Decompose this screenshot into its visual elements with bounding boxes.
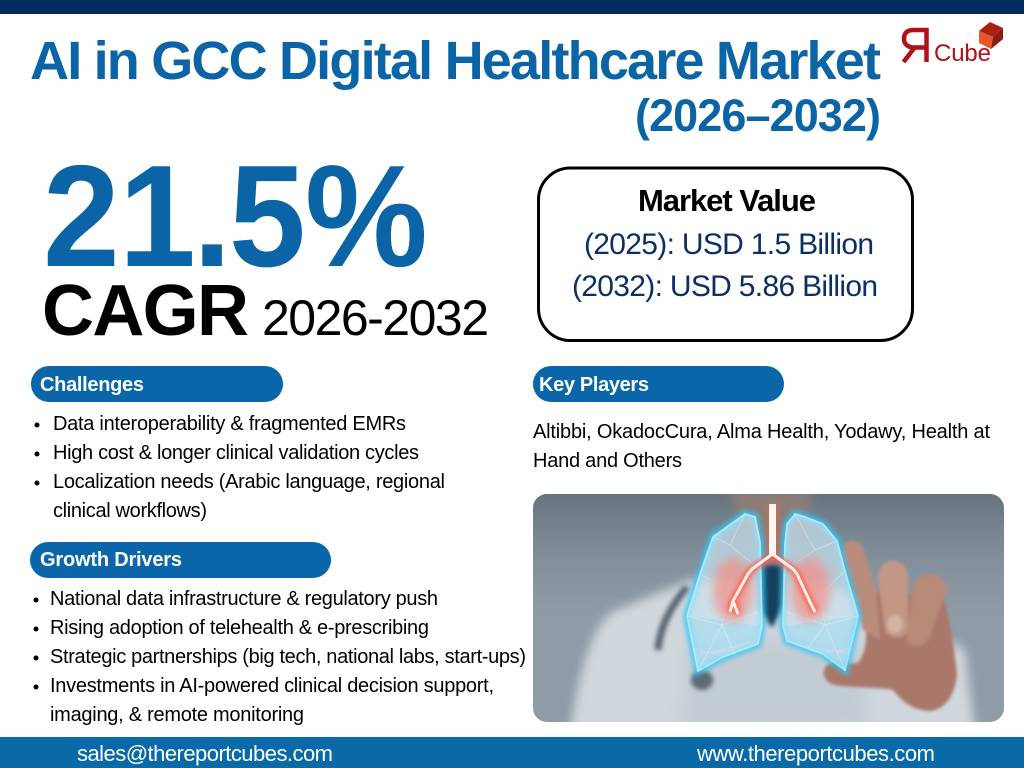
index finger (842, 541, 880, 640)
challenges list: Localization needs (Arabic language, regional (53, 471, 445, 493)
panel: key players (533, 366, 990, 472)
CAGR headline (42, 135, 489, 351)
footer email: sales@thereportcubes.com (77, 741, 333, 766)
doctor coat (570, 580, 975, 730)
key players heading: Key Players (539, 374, 649, 396)
key players text: Hand and Others (533, 450, 682, 472)
growth drivers list: National data infrastructure & regulatory push (50, 588, 438, 610)
footer website: www.thereportcubes.com (696, 741, 935, 766)
title (30, 31, 881, 141)
shirt and tie shadow (758, 565, 788, 628)
growth drivers list (34, 588, 526, 726)
top navy bar (0, 0, 1024, 14)
key players heading (533, 366, 784, 402)
fingernail (888, 615, 902, 633)
challenges list (34, 413, 445, 522)
lower lobes tint (687, 616, 760, 671)
icon: red cube (979, 22, 1003, 49)
right lung (783, 514, 858, 670)
CAGR label: CAGR (42, 271, 249, 351)
panel: challenges (31, 366, 445, 522)
middle finger (878, 560, 908, 638)
big percent: 21.5% (43, 135, 428, 297)
panel: growth drivers (30, 542, 526, 726)
ring finger (907, 574, 947, 646)
challenges list: Data interoperability & fragmented EMRs (53, 413, 406, 435)
market value 2025: (2025): USD 1.5 Billion (584, 228, 874, 261)
market value 2032: (2032): USD 5.86 Billion (572, 270, 878, 303)
key players text (533, 421, 990, 472)
logo wordmark: Cube (934, 40, 991, 67)
neck (730, 490, 812, 560)
growth drivers list: Rising adoption of telehealth & e-prescribing (50, 617, 429, 639)
title: (2026–2032) (635, 90, 881, 141)
trachea and bronchi (730, 504, 815, 614)
palm and thumb (824, 590, 957, 711)
challenges heading (31, 366, 283, 402)
icon: mirrored R mark (904, 30, 926, 62)
growth drivers list: imaging, & remote monitoring (50, 704, 304, 726)
lungs (687, 504, 858, 671)
logo: RCube (904, 22, 1003, 67)
panel: market value (538, 168, 912, 340)
left lung (687, 514, 762, 671)
footer bar (0, 737, 1024, 768)
stethoscope (658, 587, 687, 650)
title: AI in GCC Digital Healthcare Market (30, 31, 881, 91)
key players text: Altibbi, OkadocCura, Alma Health, Yodawy, Health at (533, 421, 990, 443)
growth drivers list: Strategic partnerships (big tech, national labs, start-ups) (50, 646, 526, 668)
growth drivers list: Investments in AI-powered clinical decision support, (50, 675, 494, 697)
image: doctor with glowing lungs (533, 490, 1004, 730)
challenges list: clinical workflows) (53, 500, 207, 522)
challenges list: High cost & longer clinical validation cycles (53, 442, 419, 464)
facet lines (687, 514, 858, 671)
red glow (713, 558, 753, 622)
CAGR period: 2026-2032 (262, 290, 489, 346)
challenges heading: Challenges (40, 374, 144, 396)
hand (824, 541, 957, 711)
lung glow (687, 514, 762, 671)
growth drivers heading (30, 542, 331, 578)
market value heading: Market Value (638, 183, 816, 218)
growth drivers heading: Growth Drivers (40, 549, 182, 571)
